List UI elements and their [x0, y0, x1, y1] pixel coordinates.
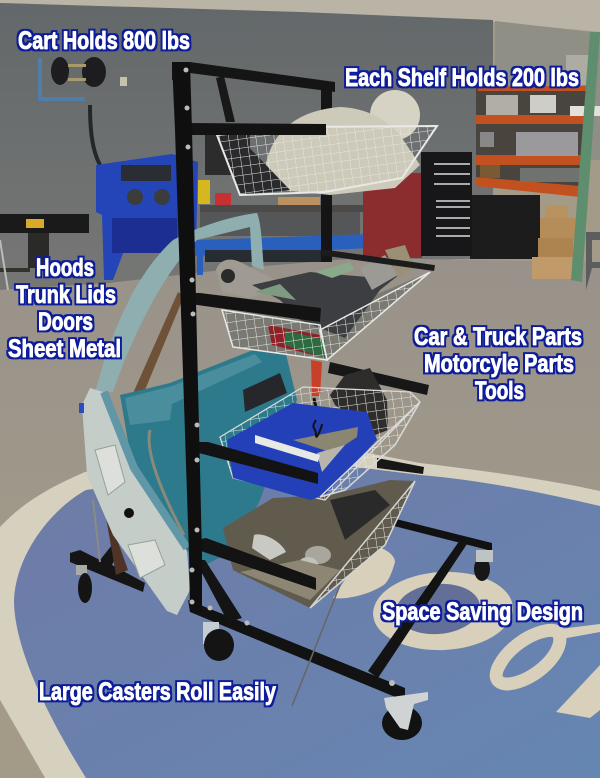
green rack post: [571, 32, 600, 282]
wall: [0, 3, 493, 290]
tank on top shelf: [218, 90, 420, 195]
strap and hook: [311, 360, 322, 428]
rear post: [216, 76, 235, 122]
basket 1: [217, 126, 437, 195]
caster front left: [203, 622, 234, 661]
cart: [172, 62, 493, 740]
blue bin: [227, 403, 377, 500]
window opening: [243, 373, 287, 412]
logo script: [333, 545, 395, 598]
top bar: [172, 62, 335, 92]
paper: [317, 445, 345, 472]
black tool chest: [421, 152, 472, 256]
bag behind bin: [330, 368, 388, 435]
back bars: [328, 362, 429, 474]
cardboard boxes: [532, 205, 575, 279]
icon: wall hose reels: [40, 57, 127, 165]
floor logo disc: [0, 440, 600, 778]
floor: [0, 258, 600, 778]
front base bar: [188, 600, 405, 701]
casters: [203, 550, 493, 740]
black table: [0, 214, 89, 290]
label: body types list: Sheet Metal: [8, 335, 121, 363]
label: Cart Holds 800 lbs: Cart Holds 800 lbs: [18, 27, 190, 55]
diagonal base bar: [368, 540, 467, 678]
shelf arm 4: [196, 538, 316, 590]
label: parts list: Tools: [475, 377, 524, 405]
basket 4 with parts: [223, 480, 415, 608]
red cabinet: [363, 173, 422, 258]
label: parts list: [414, 323, 582, 405]
bolts: [184, 68, 395, 686]
label: body types list: [8, 254, 121, 363]
teal panel: [120, 350, 297, 565]
dark tank part: [252, 262, 405, 338]
blue flag: [79, 403, 84, 413]
label: body types list: Doors: [38, 308, 93, 336]
blue sandblast cabinet: [96, 154, 198, 280]
shelf arm 3: [193, 442, 318, 484]
rear right base bar: [390, 518, 492, 551]
right beige wall: [495, 21, 600, 160]
basket 2 with parts: [216, 245, 435, 360]
background equipment: [0, 32, 600, 290]
label: body types list: Trunk Lids: [16, 281, 116, 309]
basket 3 side panel: [320, 402, 420, 497]
ceiling: [0, 0, 600, 32]
exhaust pipe: [216, 260, 285, 298]
thin rod: [292, 585, 340, 706]
rear left base with caster: [70, 500, 145, 603]
rolling tool cart: [470, 195, 540, 259]
shelf arm 2: [188, 293, 321, 322]
lighter panel band: [125, 354, 262, 425]
brown interior strip: [130, 292, 184, 402]
orange shelving: [476, 55, 600, 197]
base frame: [188, 518, 492, 701]
door: [79, 213, 297, 615]
caster front right: [382, 692, 428, 740]
rag: [293, 427, 358, 453]
window frame: [95, 213, 264, 392]
label: Large Casters Roll Easily: Large Casters Roll Easily: [39, 678, 276, 706]
white primered edge: [82, 388, 190, 615]
label: body types list: Hoods: [36, 254, 94, 282]
hook: [313, 420, 322, 437]
main front post: [172, 62, 202, 612]
stool: [586, 232, 600, 290]
shelf arm 1: [185, 123, 326, 135]
basket 3 back wires: [220, 387, 420, 500]
caster rear right: [474, 550, 493, 581]
frame brace: [195, 560, 242, 622]
back bench with tools: [195, 125, 372, 275]
